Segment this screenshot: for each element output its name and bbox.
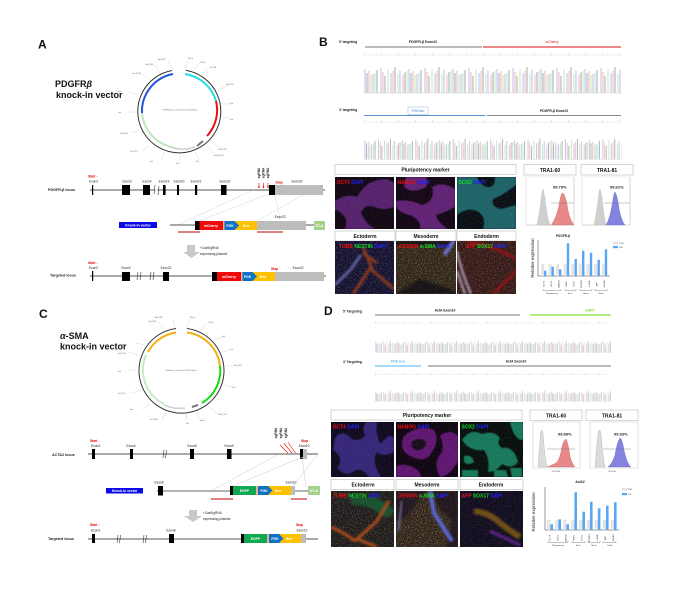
bar chart: PDGFR-beta relative expression: Relative expression [530,238,535,278]
histogram: TRA1-81 [590,422,638,473]
bar chart: PDGFR-beta relative expression: AFP [596,281,598,286]
gene diagram: ACTA2 locus: Exon9 [224,444,234,448]
sequencing: 5' targeting: ActA Exon10 [435,308,456,312]
bar chart: ActA2 relative expression: Relative expression [531,492,536,532]
header: TRA1-81: TRA1-81 [597,168,617,174]
plasmid map: alpha-SMA: NcoI [230,349,234,351]
gene diagram: ACTA2 locus: Exon8 [187,444,197,448]
heading: alpha-SMA knock-in vector: knock-in vector [60,342,127,352]
bar chart: PDGFR-beta relative expression: Meso [583,293,589,295]
plasmid map: alpha-SMA: SacII (8400) [150,419,159,421]
plasmid map: PDGFR-beta: NcoI [230,103,234,105]
bar chart: ActA2 relative expression: OTX2 [582,534,584,541]
histogram: TRA1-60: 99.79% [553,184,567,190]
plasmid map: alpha-SMA: XbaI (1980) [234,365,242,367]
plasmid map: alpha-SMA: NotI [186,422,189,425]
gene diagram: ACTA2 locus [52,427,318,490]
arrow: Cas9/gRNA transfection: expressing plasmid [203,517,231,521]
panel label B: B [319,35,328,49]
bar chart: PDGFR-beta relative expression: PDGFR-β [556,234,570,238]
gene diagram: ACTA2 locus: sgRNA [284,427,288,438]
bar chart: ActA2 relative expression [531,480,633,547]
panel label A: A [38,38,47,52]
gene diagram: PDGFR-beta knock-in vector [119,215,325,232]
arrow: Cas9/gRNA transfection: +Cas9/gRNA [200,246,220,250]
gene diagram: PDGFR-beta knock-in vector: Neo [243,224,249,228]
header: Endoderm [460,480,523,490]
header: TRA1-60: TRA1-60 [546,413,566,419]
micrograph: NANOG DAPI [396,177,455,229]
gene diagram: ACTA2 targeted locus: Exon10 [297,528,308,532]
header: TRA1-60: TRA1-60 [540,168,560,174]
plasmid map: alpha-SMA: KpnI [118,371,122,373]
gene diagram: PDGFR-beta locus: Exon23 [292,180,303,184]
bar chart: ActA2 relative expression: Endo [607,545,613,547]
plasmid map: PDGFR-beta: KpnI (9600) [120,133,128,135]
micrograph: NANOG DAPI: NANOG DAPI [398,180,430,186]
header: TRA1-81 [586,410,638,420]
plasmid map: PDGFR-beta: PstI (9121) [130,150,138,153]
histogram: TRA1-60: FITC-A [552,470,560,473]
sequencing: 5' targeting: 5' Targeting [343,310,362,314]
gene diagram: ACTA2 locus: sgRNA [279,427,283,438]
gene diagram: PDGFR-beta locus: PDGFR-β locus [48,188,75,192]
micrograph: DESMIN alpha-SMA DAPI [396,491,458,547]
header: TRA1-81: TRA1-81 [602,413,622,419]
gene diagram: PDGFR-beta locus: sgRNA [257,167,261,178]
micrograph: OCT4 DAPI: OCT4 DAPI [332,424,360,430]
plasmid map: PDGFR-beta: XbaI [230,119,234,121]
plasmid map: alpha-SMA: PstI (9121) [118,392,126,395]
arrow: Cas9/gRNA transfection [184,510,231,522]
plasmid map: PDGFR-beta: BglII (1450) [226,84,234,86]
bar chart: PDGFR-beta relative expression: EB [620,247,623,249]
header: TRA1-81 [581,164,633,175]
bar chart: PDGFR-beta relative expression: NANOG [558,280,560,288]
sequencing: 5' targeting: 5' targeting [339,40,357,44]
sequencing: 3' targeting [339,107,622,160]
plasmid map: alpha-SMA: SphI (9780) [118,353,126,355]
bar chart: ActA2 relative expression: EOMES [589,534,591,542]
bar chart: ActA2 relative expression: ActA2 [575,480,585,484]
histogram: TRA1-81: FITC-A [608,470,616,473]
gene diagram: ACTA2 locus: Exon3 [91,444,100,448]
bar chart: ActA2 relative expression: Pluripotency [552,544,565,547]
gene diagram: PDGFR-beta targeted locus: Stop [271,267,278,271]
gene diagram: ACTA2 locus: Exon4 [126,444,136,448]
gene diagram: ACTA2 targeted locus: Stop [296,523,303,527]
plasmid map: PDGFR-beta: EcoRI (7512) [218,149,227,151]
gene diagram: ACTA2 targeted locus: Exon3 [91,528,100,532]
bar chart: PDGFR-beta relative expression [530,234,624,295]
micrograph: TUBB NESTIN DAPI: TUBB NESTIN DAPI [333,494,381,500]
micrograph: TUBB NESTIN DAPI [331,491,394,547]
gene diagram: PDGFR-beta targeted locus: Exon22 [161,266,172,270]
gene diagram: PDGFR-beta targeted locus: Start→ [88,261,98,265]
plasmid map: PDGFR-beta: SacII [176,163,180,165]
sequencing: 5' targeting: PDGFR-β Exon23 [409,40,437,44]
micrograph: AFP SOX17 DAPI [460,491,523,547]
gene diagram: PDGFR-beta knock-in vector: mCherry [204,224,218,228]
header: TRA1-60 [524,164,576,175]
gene diagram: PDGFR-beta targeted locus: Exon3 [121,266,131,270]
micrograph: SOX2 DAPI: SOX2 DAPI [458,180,486,186]
plasmid map: alpha-SMA: BamHI [200,420,205,422]
header: Mesoderm: Mesoderm [414,482,440,488]
histogram: TRA1-60 [526,177,574,225]
gene diagram: PDGFR-beta locus: Stop [276,180,283,184]
sequencing: 3' targeting: PGK neo [391,360,405,364]
plasmid map: PDGFR-beta: AgeI (1187) [158,58,166,61]
plasmid map: PDGFR-beta [118,58,234,165]
bar chart: ActA2 relative expression: AFP [604,535,607,540]
heading: PDGFR-beta knock-in vector: knock-in vector [56,90,123,100]
bar chart: PDGFR-beta relative expression: Endo [598,293,604,295]
bar chart: ActA2 relative expression: OCT4 [550,534,552,541]
header: Endoderm: Endoderm [479,482,504,488]
plasmid map: alpha-SMA: EcoRI (7512) [218,414,227,416]
micrograph: OCT4 DAPI [331,422,394,477]
gene diagram: PDGFR-beta locus: Exon21 [191,180,202,184]
gene diagram: PDGFR-beta targeted locus: Exon2 [89,266,98,270]
gene diagram: ACTA2 knock-in vector: Exon10 [286,480,297,484]
plasmid map: alpha-SMA: HpaI [130,409,134,411]
bar chart: ActA2 relative expression: NANOG [564,534,568,542]
gene diagram: ACTA2 locus: Start→ [90,439,100,443]
gene diagram: PDGFR-beta targeted locus: Targeted locus [50,274,76,278]
gene diagram: PDGFR-beta targeted locus: Exon23 [293,266,304,270]
gene diagram: PDGFR-beta targeted locus: mCherry [222,275,236,279]
plasmid map: PDGFR-beta: PDGFRβ knock-in vector pUC57 mCherry-PGK-Neo [163,108,198,112]
sequencing: 5' targeting [339,40,621,93]
gene diagram: PDGFR-beta knock-in vector: Exon23 [275,215,286,219]
header: Pluripotency marker [331,410,522,420]
bar chart: PDGFR-beta relative expression: Pluripotency [546,292,559,295]
header: Pluripotency marker: Pluripotency marker [401,168,450,174]
gene diagram: PDGFR-beta locus: Exon20 [174,180,185,184]
gene diagram: ACTA2 knock-in vector: PGK [260,489,268,493]
gene diagram: PDGFR-beta targeted locus [50,261,326,281]
plasmid map: alpha-SMA: MluI (2) [190,317,196,319]
plasmid map: alpha-SMA: PmeI [232,387,236,389]
micrograph: AFP SOX17 DAPI: ATP SOX17 DAPI [466,244,507,250]
histogram: TRA1-81 [582,177,630,225]
micrograph: DESMIN alpha-SMA DAPI: DESMIN α-SMA DAPI [398,494,448,500]
histogram: TRA1-81: 99.62% [610,184,624,190]
micrograph: TUBB NESTIN DAPI [335,241,394,294]
gene diagram: ACTA2 targeted locus: Exon8 [166,528,176,532]
gene diagram: PDGFR-beta locus: Start→ [88,174,98,178]
gene diagram: PDGFR-beta locus: sgRNA [262,167,266,178]
bar chart: PDGFR-beta relative expression: GATA4 [603,280,606,287]
gene diagram: ACTA2 targeted locus: EGFP [251,537,261,541]
plasmid map: PDGFR-beta: HpaI [150,161,154,163]
sequencing: 3' targeting: 3' Targeting [343,360,362,364]
plasmid map: alpha-SMA: AgeI (1187) [155,316,163,319]
gene diagram: PDGFR-beta targeted locus: PGK [244,275,252,279]
gene diagram: PDGFR-beta locus: Exon22 [220,180,231,184]
gene diagram: PDGFR-beta knock-in vector: Knock-in vector [125,223,151,227]
gene diagram: ACTA2 targeted locus: Start→ [90,523,100,527]
arrow: Cas9/gRNA transfection [183,245,228,258]
plasmid map: alpha-SMA: α-SMA knock-in vector pUC57 EGFP-PGK-Neo [165,369,197,372]
bar chart: PDGFR-beta relative expression: α-SMA [588,280,591,287]
panel: D [324,304,638,547]
sequencing: 3' targeting: PGKneo [412,109,425,113]
bar chart: ActA2 relative expression: SOX2 [558,534,560,541]
plasmid map: alpha-SMA: XhoI (11510) [148,321,157,323]
header: TRA1-60 [530,410,582,420]
bar chart: PDGFR-beta relative expression: OCT4 [544,280,546,287]
micrograph: DESMIN alpha-SMA DAPI [396,241,456,294]
header: Ectoderm: Ectoderm [351,482,375,488]
bar chart: PDGFR-beta relative expression: PSC [620,243,624,245]
gene diagram: ACTA2 targeted locus: Targeted locus [48,537,74,541]
micrograph: NANOG DAPI: NANOG DAPI [398,424,430,430]
gene diagram: ACTA2 targeted locus: Neo [286,537,292,541]
header: Ectoderm [335,231,395,241]
gene diagram: PDGFR-beta targeted locus: Neo [260,275,266,279]
sequencing: 5' targeting [343,308,611,353]
bar chart: ActA2 relative expression: PAX6 [572,535,576,541]
sequencing: 5' targeting: mCherry [546,40,559,44]
plasmid map: PDGFR-beta: PvuI (88) [210,67,217,69]
gene diagram: ACTA2 locus: sgRNA [274,427,278,438]
bar chart: PDGFR-beta relative expression: PAX6 [565,281,568,287]
plasmid map: PDGFR-beta: NotI [196,160,199,163]
gene diagram: ACTA2 locus: ACTA2 locus [52,453,75,457]
heading: PDGFR-beta knock-in vector: PDGFRβ [55,79,92,89]
plasmid map: PDGFR-beta: XhoI (11510) [145,64,154,66]
sequencing: 3' targeting: 3' targeting [339,108,357,112]
sequencing: 3' targeting [343,360,611,402]
bar chart: ActA2 relative expression: α-SMA [596,534,599,541]
micrograph: DESMIN alpha-SMA DAPI: DESMIN α-SMA DAPI [399,244,449,250]
panel: B [319,35,633,295]
gene diagram: PDGFR-beta locus: Exon2 [89,180,98,184]
bar chart: PDGFR-beta relative expression: OTX2 [574,280,576,287]
header: Pluripotency marker [335,164,516,174]
plasmid map: PDGFR-beta: BamHI (7320) [214,155,224,157]
plasmid map: alpha-SMA: SalI (41) [208,322,214,324]
gene diagram: ACTA2 targeted locus [48,523,318,543]
histogram: TRA1-81: 99.93% [614,432,628,436]
gene diagram: PDGFR-beta knock-in vector: PGK [226,224,234,228]
micrograph: OCT4 DAPI: OCT4 DAPI [336,180,364,186]
micrograph: OCT4 DAPI [335,177,394,229]
gene diagram: PDGFR-beta locus: Exon4 [142,180,152,184]
arrow: Cas9/gRNA transfection: expressing plasmid [200,252,228,256]
panel label D: D [324,304,333,318]
bar chart: ActA2 relative expression: PSC [628,489,633,491]
plasmid map: PDGFR-beta: SphI [118,112,122,114]
header: Mesoderm [396,480,458,490]
gene diagram: ACTA2 knock-in vector: Exon8 [154,480,164,484]
micrograph: SOX2 DAPI: SOX2 DAPI [462,424,489,430]
bar chart: PDGFR-beta relative expression: Ecto [568,292,573,295]
plasmid map: PDGFR-beta: SmaI (11240) [132,73,141,75]
gene diagram: PDGFR-beta locus: Exon19 [159,180,170,184]
panel: A [38,38,326,281]
gene diagram: ACTA2 targeted locus: PGK [271,537,279,541]
plasmid map: alpha-SMA: ApaI [122,343,126,346]
bar chart: PDGFR-beta relative expression: SOX2 [551,280,553,287]
micrograph: AFP SOX17 DAPI [457,241,516,294]
sequencing: 3' targeting: ActA Exon10 [506,360,527,364]
gene diagram: PDGFR-beta locus: sgRNA [266,167,270,178]
gene diagram: ACTA2 locus: Exon10 [299,444,310,448]
bar chart: ActA2 relative expression: DS [628,494,632,496]
header: Ectoderm: Ectoderm [353,234,377,240]
header: Mesoderm [396,231,456,241]
header: Endoderm: Endoderm [474,234,499,240]
gene diagram: PDGFR-beta locus: Exon3 [122,180,132,184]
header: Endoderm [457,231,516,241]
plasmid map: alpha-SMA: BglII [222,336,226,338]
histogram: TRA1-60 [533,422,580,473]
panel label C: C [39,307,48,321]
sequencing: 3' targeting: PDGFR-β Exon23 [540,109,568,113]
plasmid map: PDGFR-beta: SalI (41) [200,62,206,64]
gene diagram: ACTA2 knock-in vector: Neo [275,489,281,493]
heading: alpha-SMA knock-in vector: α-SMA [60,331,89,341]
gene diagram: ACTA2 locus: Stop [301,439,308,443]
bar chart: ActA2 relative expression: GATA4 [612,534,615,541]
gene diagram: ACTA2 knock-in vector: EGFP [240,489,250,493]
gene diagram: PDGFR-beta locus [48,167,325,225]
micrograph: AFP SOX17 DAPI: AFP SOX17 DAPI [462,494,503,500]
header: Pluripotency marker: Pluripotency marker [403,413,451,419]
bar chart: ActA2 relative expression: Meso [591,545,597,547]
bar chart: PDGFR-beta relative expression: EOMES [581,280,583,288]
micrograph: NANOG DAPI [396,422,458,477]
gene diagram: ACTA2 knock-in vector: DT-A [310,489,319,493]
gene diagram: ACTA2 knock-in vector: Knock-in vector [112,489,138,493]
sequencing: 5' targeting: EGFP [585,308,595,312]
gene diagram: ACTA2 knock-in vector [106,480,320,499]
bar chart: ActA2 relative expression: Ecto [576,544,581,547]
micrograph: SOX2 DAPI [457,177,516,229]
header: Ectoderm [331,480,394,490]
plasmid map: PDGFR-beta: ApaI [118,90,122,93]
gene diagram: PDGFR-beta knock-in vector: DT-A [316,224,324,228]
histogram: TRA1-60: 99.89% [558,432,572,436]
micrograph: SOX2 DAPI [460,422,523,477]
panel: C [39,307,320,543]
micrograph: TUBB NESTIN DAPI: TUBB NESTIN DAPI [339,244,387,250]
header: Mesoderm: Mesoderm [413,234,439,240]
arrow: Cas9/gRNA transfection: +Cas9/gRNA [203,511,223,515]
plasmid map: PDGFR-beta: MluI (2) [188,58,194,60]
plasmid map: alpha-SMA [118,316,242,425]
